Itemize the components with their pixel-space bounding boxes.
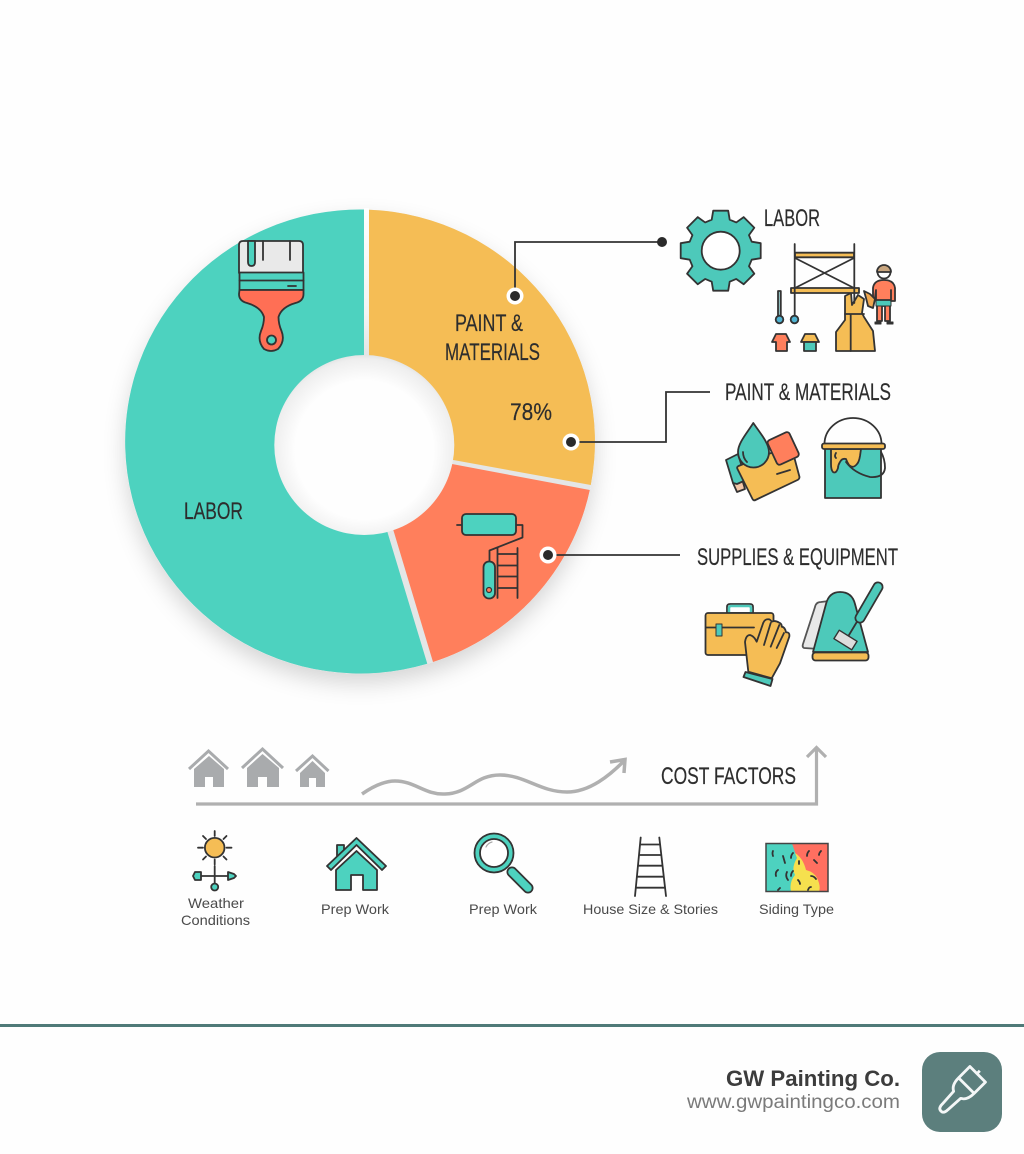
donut label: paint and materials: PAINT & — [455, 310, 523, 337]
factor: prep work magnifier — [469, 834, 538, 917]
donut label: paint and materials — [445, 310, 540, 366]
icon: paint swatches and drop — [726, 423, 800, 500]
footer brand text — [686, 1066, 900, 1113]
scaffold — [795, 253, 854, 257]
label: Prep Work — [469, 901, 538, 917]
heading: cost factors: COST FACTORS — [661, 763, 796, 790]
icon: plaster mound and trowel — [803, 587, 878, 660]
house small left — [194, 756, 224, 787]
label: House Size & Stories — [583, 901, 718, 917]
leader line: paint and materials — [562, 392, 710, 450]
icon: siding swatch — [766, 844, 828, 892]
house large — [247, 754, 279, 787]
leader line: labor — [506, 237, 667, 304]
label — [181, 895, 250, 928]
footer logo — [922, 1052, 1002, 1132]
leader line: supplies and equipment — [540, 546, 680, 564]
icon: magnifying glass — [474, 834, 528, 888]
icon: paint brush — [239, 241, 304, 351]
heading: paint and materials: PAINT & MATERIALS — [725, 379, 891, 406]
icon: scaffold and worker — [772, 244, 895, 351]
small houses — [772, 334, 790, 351]
footer divider — [0, 1024, 1024, 1027]
axis arrow — [196, 748, 826, 804]
icon: gear — [681, 211, 761, 291]
icon: paint roller and ladder — [457, 514, 522, 598]
segment: labor — [125, 209, 427, 673]
factor: prep work house — [321, 838, 390, 917]
segment: paint and materials — [369, 210, 595, 485]
icon: logo brush — [933, 1064, 988, 1119]
top divider — [364, 208, 369, 358]
donut shadow base and dividers — [125, 210, 595, 674]
label: Weather — [188, 895, 244, 911]
label: Prep Work — [321, 901, 390, 917]
cost factors axis — [196, 748, 826, 804]
icon: sun and wind vane — [193, 831, 236, 890]
label: Siding Type — [759, 901, 834, 917]
heading: labor: LABOR — [764, 205, 820, 232]
factor: house size and stories — [583, 838, 718, 917]
factor: weather conditions — [181, 831, 250, 928]
wavy trend arrow — [362, 760, 625, 794]
worker — [877, 303, 890, 321]
label: Conditions — [181, 912, 250, 928]
house smallest — [300, 761, 325, 787]
factor: siding type — [759, 844, 834, 917]
donut label: labor: LABOR — [184, 498, 243, 525]
apron figure — [836, 293, 875, 351]
icon: ladder — [635, 838, 666, 896]
heading: supplies and equipment: SUPPLIES & EQUIPMENT — [697, 544, 898, 571]
segment: supplies and equipment — [375, 458, 590, 662]
donut hole — [274, 355, 454, 535]
small brush — [778, 291, 781, 316]
donut label: paint and materials: MATERIALS — [445, 339, 540, 366]
icon: toolbox and glove — [706, 604, 789, 686]
donut value: 78%: 78% — [510, 399, 552, 426]
footer brand text: GW Painting Co. — [726, 1066, 900, 1091]
donut chart — [125, 208, 595, 674]
icon: house — [327, 838, 386, 890]
footer brand text: www.gwpaintingco.com — [686, 1092, 900, 1113]
houses size row — [189, 749, 328, 787]
icon: paint bucket — [822, 418, 885, 498]
